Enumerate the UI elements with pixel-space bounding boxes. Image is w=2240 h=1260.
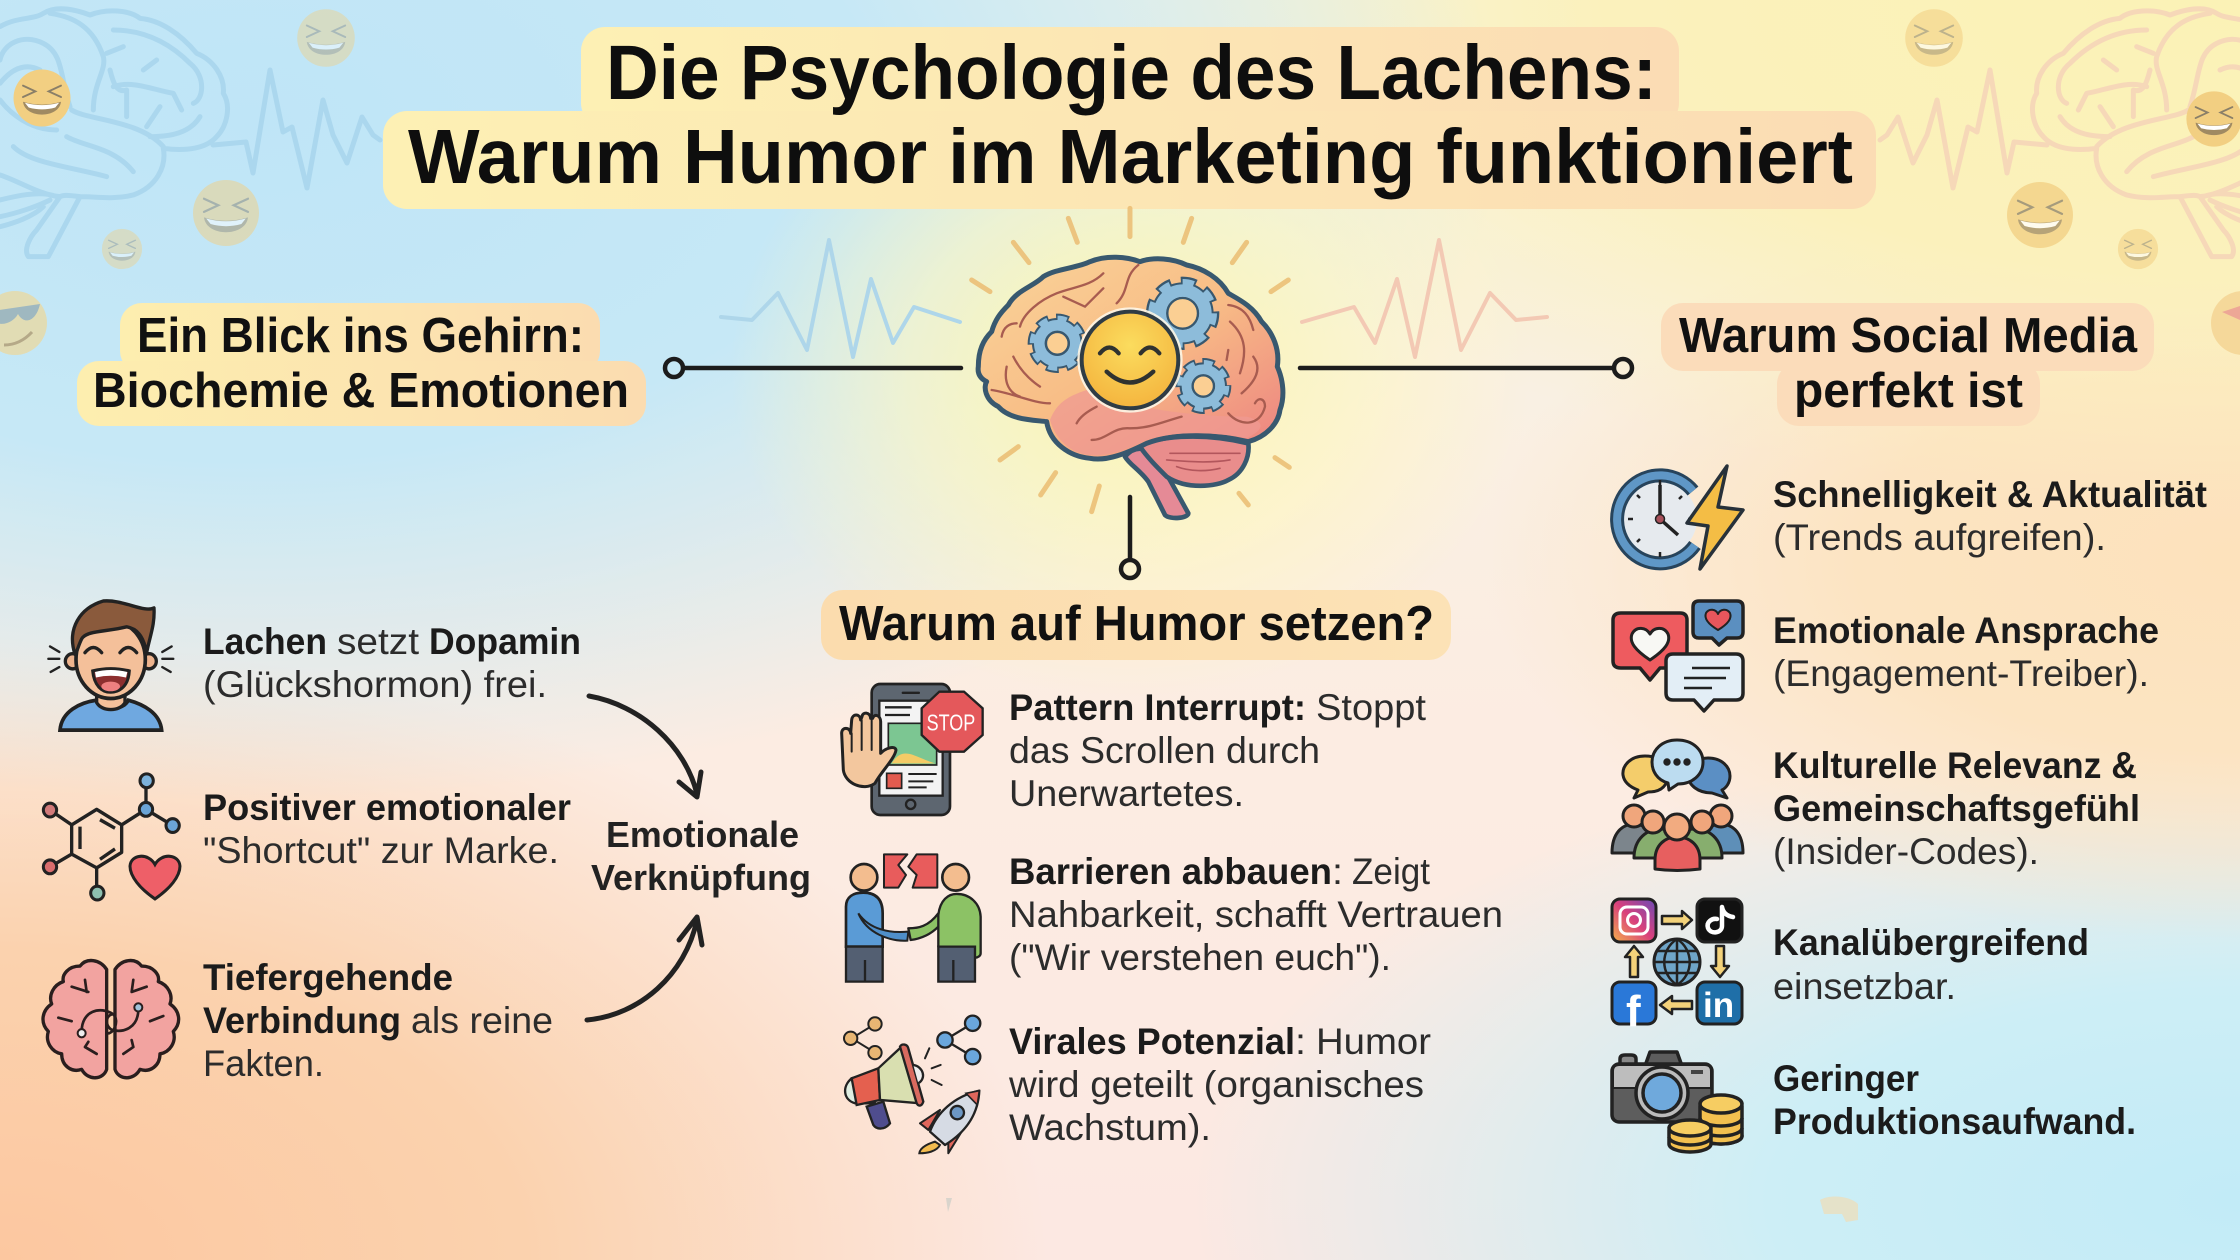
right text 1: (Trends aufgreifen). — [1773, 517, 2106, 558]
pulse line right — [1302, 240, 1547, 357]
cerebrum — [978, 257, 1283, 459]
middle text 3 — [1008, 1021, 1431, 1148]
heading: right: Warum Social Media — [1679, 309, 2138, 363]
icon: megaphone, share and rocket — [844, 1016, 980, 1153]
left text 3 — [203, 957, 553, 1084]
small artefact bottom centre — [946, 1198, 952, 1212]
right text 4: Kanalübergreifend — [1773, 922, 2089, 963]
right text 5: Produktionsaufwand. — [1773, 1101, 2136, 1142]
pulse line left — [721, 240, 960, 357]
heading: center: Warum auf Humor setzen? — [839, 597, 1434, 651]
label: emotional link: Emotionale — [606, 814, 799, 855]
connector left — [665, 359, 961, 377]
right text 3: Kulturelle Relevanz & — [1773, 745, 2137, 786]
background pattern: right brain and pulse — [1880, 9, 2240, 257]
icon: speech bubbles with hearts — [1613, 601, 1743, 711]
lower lobe — [1050, 390, 1261, 455]
smiley — [1077, 307, 1183, 413]
middle text 1: Unerwartetes. — [1009, 773, 1244, 814]
right text 4: einsetzbar. — [1773, 966, 1956, 1007]
brain stem — [1125, 449, 1188, 518]
heading: left: Biochemie & Emotionen — [93, 364, 629, 418]
right text 2: Emotionale Ansprache — [1773, 610, 2159, 651]
middle text 1: das Scrollen durch — [1009, 730, 1320, 771]
middle text 2: : — [1332, 851, 1343, 892]
left text 1: Lachen — [203, 621, 327, 662]
background pattern: left brain and pulse — [0, 9, 380, 257]
background emoji right — [1905, 9, 2240, 355]
small artefact bottom right — [1820, 1197, 1858, 1222]
icon: handshake and broken wall — [846, 854, 981, 982]
gears — [1034, 284, 1225, 408]
middle text 3: Virales Potenzial — [1009, 1021, 1295, 1062]
right text 4 — [1773, 922, 2089, 1007]
right text 3 — [1773, 745, 2140, 872]
middle text 3: : — [1295, 1021, 1306, 1062]
icon: camera and coins — [1612, 1052, 1742, 1152]
right text 5: Geringer — [1773, 1058, 1919, 1099]
left text 1: Dopamin — [429, 621, 581, 662]
left text 2 — [203, 787, 571, 871]
heading: right: perfekt ist — [1794, 364, 2023, 418]
left text 3: Tiefergehende — [203, 957, 453, 998]
connector right — [1300, 359, 1632, 377]
middle text 1: Pattern Interrupt: — [1009, 687, 1306, 728]
brain folds — [992, 265, 1265, 440]
title: Die Psychologie des Lachens: — [606, 30, 1657, 116]
right text 5 — [1773, 1058, 2136, 1142]
left text 2: "Shortcut" zur Marke. — [203, 830, 559, 871]
icon: laughing person — [48, 601, 173, 730]
light rays — [972, 208, 1289, 512]
middle text 1: Stoppt — [1316, 687, 1427, 728]
left text 1: setzt — [337, 621, 420, 662]
middle text 3: Humor — [1316, 1021, 1431, 1062]
heading: left — [77, 303, 646, 426]
connector bottom — [1121, 497, 1139, 578]
middle text 1 — [1009, 687, 1427, 814]
arrow to emotional link, top — [589, 696, 701, 797]
left text 1 — [203, 621, 581, 705]
left text 2: Positiver emotionaler — [203, 787, 571, 828]
middle text 2 — [1009, 851, 1503, 978]
left text 3: Verbindung — [203, 1000, 401, 1041]
background emoji left — [0, 9, 355, 355]
label: emotional link: Verknüpfung — [591, 857, 811, 898]
left text 1: (Glückshormon) frei. — [203, 664, 547, 705]
middle text 2: Barrieren abbauen — [1009, 851, 1332, 892]
right text 1: Schnelligkeit & Aktualität — [1773, 474, 2207, 515]
right text 3: (Insider-Codes). — [1773, 831, 2039, 872]
right text 1 — [1773, 474, 2207, 558]
heading: left: Ein Blick ins Gehirn: — [137, 309, 584, 363]
icon: community with speech bubbles — [1612, 740, 1743, 870]
icon: social platforms around globe: in — [1703, 986, 1734, 1025]
title — [408, 30, 1853, 200]
cerebellum — [1140, 437, 1249, 486]
label: emotional link — [591, 814, 811, 898]
icon: phone with stop sign and hand — [842, 684, 983, 815]
title highlight — [383, 27, 1876, 209]
icon: clock with lightning — [1617, 466, 1743, 569]
icon: phone with stop sign and hand: STOP — [927, 709, 975, 735]
title: Warum Humor im Marketing funktioniert — [408, 114, 1853, 200]
middle text 3: wird geteilt (organisches — [1008, 1064, 1424, 1105]
heading: right — [1661, 303, 2154, 426]
middle text 3: Wachstum). — [1009, 1107, 1211, 1148]
middle text 2: Nahbarkeit, schafft Vertrauen — [1009, 894, 1503, 935]
icon: molecule with heart — [43, 774, 180, 900]
middle text 2: Zeigt — [1352, 851, 1431, 892]
middle text 2: ("Wir verstehen euch"). — [1009, 937, 1391, 978]
right text 2: (Engagement-Treiber). — [1773, 653, 2149, 694]
left text 3: Fakten. — [203, 1043, 324, 1084]
icon: social platforms around globe: f — [1626, 987, 1641, 1036]
icon: social platforms around globe — [1612, 899, 1742, 1036]
central brain icon — [972, 208, 1289, 518]
icon: pink brain — [43, 961, 179, 1078]
right text 3: Gemeinschaftsgefühl — [1773, 788, 2140, 829]
arrow to emotional link, bottom — [587, 917, 702, 1020]
left text 3: als reine — [411, 1000, 553, 1041]
right text 2 — [1773, 610, 2159, 694]
